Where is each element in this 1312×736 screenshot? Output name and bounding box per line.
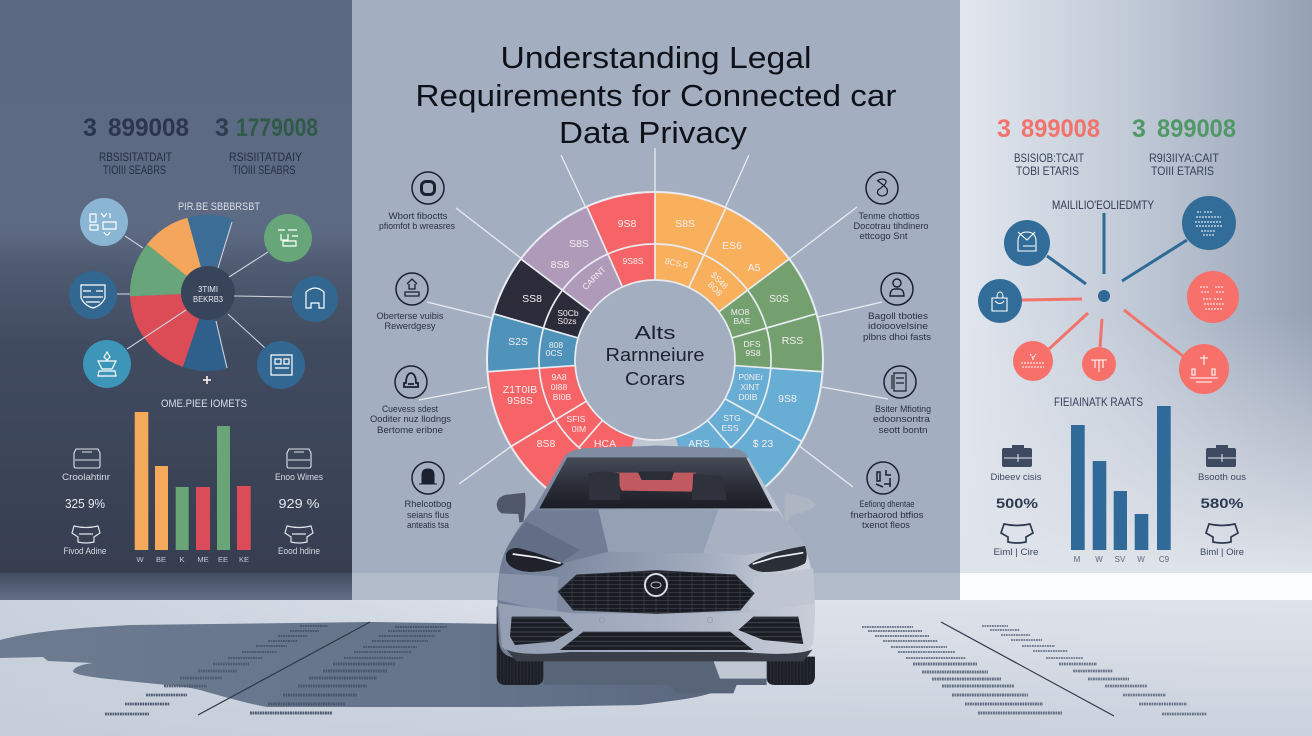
- right panel: statistics: [997, 115, 1236, 178]
- left panel: bar chart: W: [136, 555, 144, 564]
- left panel: pie chart: [134, 219, 282, 367]
- ring centre label: [606, 322, 704, 389]
- inner ring values: 8O8: [706, 280, 725, 298]
- ring centre label: Corars: [625, 368, 685, 389]
- inner ring values: 9A8: [551, 372, 567, 382]
- inner ring values: 9S8: [745, 348, 761, 358]
- inner ring values: 808: [549, 340, 563, 350]
- inner ring values: D0IB: [739, 392, 758, 402]
- inner ring values: S0zs: [558, 316, 576, 326]
- inner ring values: S0Cb: [557, 308, 579, 318]
- right panel: network diagram: [978, 196, 1239, 394]
- centre captions: left: Rhelcotbog: [404, 499, 452, 510]
- outer ring values: Z1T0IB: [503, 384, 537, 396]
- right panel: statistics: 899008: [1157, 115, 1236, 143]
- floor text rows: [105, 626, 1207, 714]
- left panel: icon circles: [69, 198, 338, 389]
- left panel: bar chart: KE: [239, 555, 249, 564]
- left panel: pie heading: PIR.BE SBBBRSBT: [178, 201, 260, 213]
- inner ring values: 9S8S: [623, 256, 644, 266]
- left panel: statistics: RSISIITATDAIY: [229, 150, 302, 164]
- inner ring values: 0CS: [546, 348, 563, 358]
- centre captions: left: anteatis tsa: [407, 520, 450, 531]
- centre captions: right: idoioovelsine: [868, 321, 928, 332]
- inner ring values: DFS: [744, 339, 761, 349]
- mirrors: [497, 493, 526, 523]
- right panel: right metric: Biml | Oire: [1200, 547, 1244, 558]
- title: Understanding Legal: [500, 40, 812, 75]
- left panel: statistics: 3: [215, 114, 229, 142]
- left panel: right metric: Enoo Wimes: [275, 472, 323, 483]
- central ring chart: [481, 186, 829, 534]
- left panel: bar chart: EE: [218, 555, 228, 564]
- centre icons: [395, 172, 916, 494]
- outer ring values: RSS: [782, 335, 803, 347]
- left panel: bar chart: K: [179, 555, 185, 564]
- outer ring values: S0S: [769, 293, 789, 305]
- right panel: bar chart heading: FIEIAINATK RAATS: [1054, 397, 1143, 409]
- inner ring values: CARNT: [580, 264, 608, 292]
- inner ring values: BAE: [733, 316, 751, 326]
- centre captions: right: Docotrau tihdinero: [854, 221, 928, 232]
- ring connector lines: [419, 148, 888, 487]
- right panel: statistics: R9I3IIYA:CAIT: [1149, 151, 1220, 165]
- floor diagonal lines: [198, 622, 1114, 716]
- ring centre label: Alts: [634, 322, 676, 343]
- right panel: right metric: 580%: [1200, 496, 1244, 511]
- centre captions: right: Tenme chottios: [858, 211, 920, 222]
- right panel: left metric: Dibeev cisis: [990, 472, 1042, 483]
- left panel: plus mark: [203, 376, 211, 384]
- centre captions: right: Bsiter Mfioting: [875, 404, 931, 415]
- outer ring values: SS8: [522, 293, 542, 305]
- outer ring segment colours: [481, 186, 829, 534]
- outer ring values: [503, 218, 803, 450]
- centre captions: left: Oberterse vuibis: [376, 311, 444, 322]
- left panel: right metric: Eood hdine: [278, 546, 320, 557]
- left panel: statistics: TIOIII SEABRS: [103, 163, 166, 177]
- bumper: [498, 603, 815, 657]
- outer ring values: ARS: [688, 438, 710, 450]
- right panel: statistics: BSISIOB:TCAIT: [1014, 151, 1085, 165]
- right panel: network heading: MAILILIO'EOLIEDMTY: [1052, 198, 1154, 212]
- left panel: bar chart: [135, 412, 251, 564]
- outer ring values: $ 23: [753, 438, 773, 450]
- right panel: statistics: TOIII ETARIS: [1151, 164, 1214, 178]
- outer ring values: HCA: [594, 438, 616, 450]
- floor shadow: [0, 622, 720, 707]
- centre captions: left: Wbort fiboctts: [388, 211, 448, 222]
- windshield: [539, 457, 773, 508]
- left panel: right metric: [275, 449, 323, 557]
- left panel: left metric: Fivod Adine: [64, 546, 106, 557]
- right panel: left metric: [990, 445, 1042, 558]
- outer ring values: 9S8: [778, 393, 797, 405]
- left panel: bar chart: BE: [156, 555, 166, 564]
- right panel: statistics: 3: [997, 115, 1011, 143]
- right panel: bar chart: [1071, 406, 1171, 564]
- inner ring values: BI0B: [553, 392, 572, 402]
- emblem: [645, 574, 667, 596]
- centre captions: left: pfiomfot b wreasres: [379, 221, 455, 232]
- outer ring values: S8S: [569, 238, 589, 250]
- centre captions: right: Eefiong dhentae: [860, 499, 914, 510]
- left panel: left metric: 325 9%: [65, 497, 105, 511]
- title: Requirements for Connected car: [416, 78, 896, 113]
- lower grille: [560, 632, 753, 650]
- car: [497, 446, 816, 693]
- centre captions: left: Ooditer nuz llodngs: [370, 414, 451, 425]
- right panel: left metric: Eiml | Cire: [994, 547, 1038, 558]
- roof band: [565, 446, 748, 459]
- inner ring values: [546, 256, 764, 434]
- outer ring values: S2S: [508, 336, 528, 348]
- left panel: pie chart: BEKRB3: [193, 294, 223, 304]
- centre captions: right: ettcogo Snt: [860, 231, 908, 242]
- title: Data Privacy: [559, 115, 748, 150]
- inner ring values: ESS: [721, 423, 739, 433]
- left panel: pie connectors: [117, 222, 292, 368]
- left panel: bar chart heading: OME.PIEE IOMETS: [161, 398, 247, 410]
- centre captions: right: [850, 211, 931, 531]
- left panel: right metric: 929 %: [278, 497, 320, 511]
- hood panels: [506, 509, 608, 564]
- inner ring values: MO8: [731, 307, 749, 317]
- left panel: left metric: Croolahtinr: [62, 472, 110, 483]
- shadow under car: [543, 660, 767, 693]
- right panel: bar chart: W: [1095, 555, 1103, 564]
- right panel: right metric: [1198, 445, 1246, 558]
- outer ring values: 9S8S: [507, 395, 533, 407]
- inner ring values: P0NEr: [738, 372, 764, 382]
- left panel: statistics: TIOIII SEABRS: [232, 163, 296, 177]
- left panel: statistics: 899008: [108, 114, 189, 142]
- inner ring values: 0I88: [551, 382, 568, 392]
- inner ring values: XINT: [740, 382, 760, 392]
- right panel: statistics: 899008: [1021, 115, 1100, 143]
- centre captions: right: fnerbaorod btfios: [850, 510, 924, 521]
- right panel: statistics: 3: [1132, 115, 1146, 143]
- left panel: statistics: RBSISITATDAIT: [99, 150, 173, 164]
- inner ring values: 0IM: [572, 424, 586, 434]
- fog vents: [510, 617, 573, 645]
- outer ring values: 9S8: [618, 218, 636, 230]
- centre captions: right: edoonsontra: [873, 414, 931, 425]
- centre captions: left: Cuevess sdest: [382, 404, 438, 415]
- centre captions: left: [370, 211, 455, 531]
- outer ring values: 8S8: [551, 259, 569, 271]
- main grille: [558, 571, 754, 613]
- outer ring values: 8S8: [537, 438, 555, 450]
- outer ring values: A5: [748, 262, 761, 274]
- centre captions: right: plbns dhoi fasts: [863, 332, 931, 343]
- centre captions: left: Rewerdgesy: [384, 321, 436, 332]
- left panel: left metric: [62, 449, 110, 557]
- centre captions: left: Bertome eribne: [377, 425, 443, 436]
- right panel: bar chart: M: [1074, 555, 1081, 564]
- left panel: statistics: [83, 114, 318, 177]
- outer ring values: ES6: [722, 240, 742, 252]
- right panel: bar chart: SV: [1115, 555, 1126, 564]
- left panel: statistics: 3: [83, 114, 97, 142]
- inner ring values: 8CS.6: [664, 256, 689, 270]
- left panel: statistics: 1779008: [236, 114, 318, 142]
- right panel: bar chart: W: [1137, 555, 1145, 564]
- inner ring values: $S48: [709, 270, 730, 291]
- headlights: [506, 548, 564, 572]
- ring centre label: Rarnneiure: [606, 344, 704, 365]
- right panel: bar chart: C9: [1159, 555, 1170, 564]
- centre captions: right: Bagoll tboties: [868, 311, 928, 322]
- title: [416, 40, 896, 150]
- body with pillars and roof: [497, 446, 815, 660]
- inner ring values: STG: [723, 413, 741, 423]
- centre captions: right: txenot fleos: [862, 520, 910, 531]
- centre captions: left: seians fIus: [407, 510, 449, 521]
- right panel: right metric: Bsooth ous: [1198, 472, 1246, 483]
- left panel: pie chart: 3TIMI: [198, 284, 218, 294]
- tyres: [497, 607, 815, 685]
- centre captions: right: seott bontn: [878, 425, 928, 436]
- right panel: statistics: TOBI ETARIS: [1016, 164, 1079, 178]
- right panel: left metric: 500%: [996, 496, 1038, 511]
- left panel: bar chart: ME: [197, 555, 209, 564]
- outer ring values: S8S: [675, 218, 695, 230]
- inner ring values: SFIS: [567, 414, 586, 424]
